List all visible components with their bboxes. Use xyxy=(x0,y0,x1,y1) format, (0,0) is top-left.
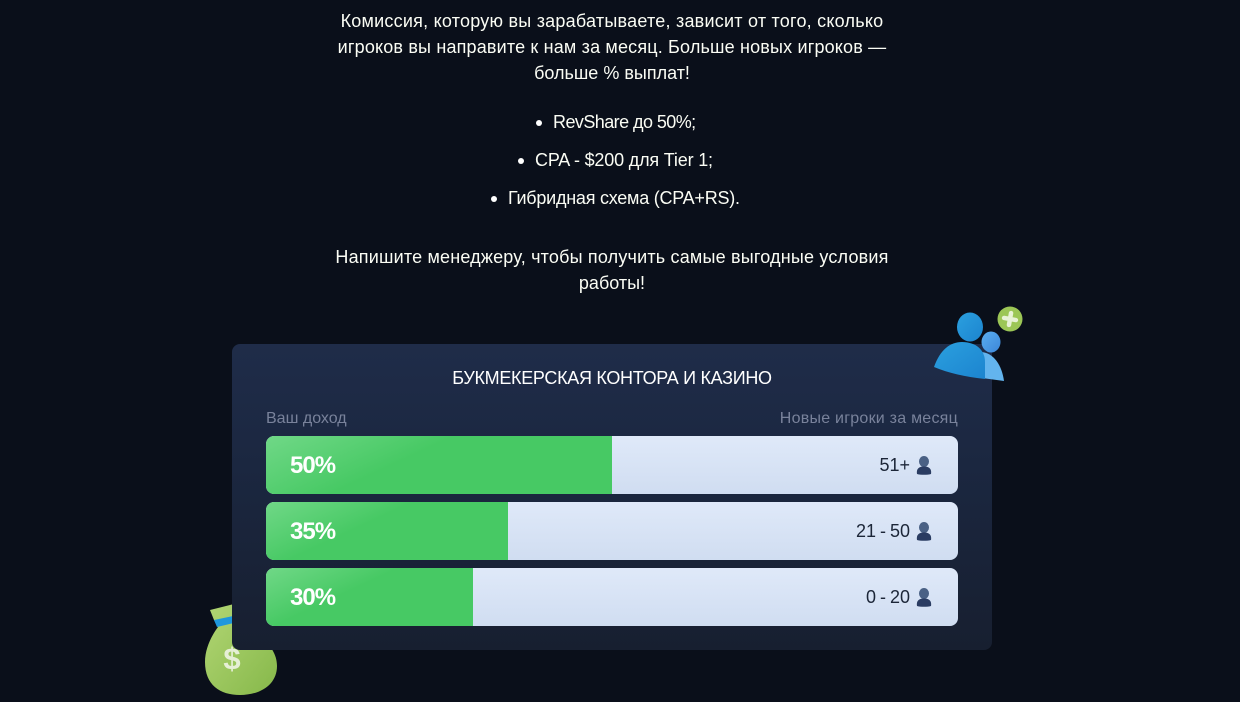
bar: 30%: 30% xyxy=(290,584,335,611)
column label: new players: Новые игроки за месяц xyxy=(780,410,958,427)
bullet list xyxy=(491,112,740,208)
panel heading: БУКМЕКЕРСКАЯ КОНТОРА И КАЗИНО xyxy=(452,368,772,388)
column label: income: Ваш доход xyxy=(266,410,347,427)
intro text: Комиссия, которую вы зарабатываете, зависит от того, сколько xyxy=(341,11,883,31)
manager call to action xyxy=(335,247,889,293)
intro text: игроков вы направите к нам за месяц. Больше новых игроков — xyxy=(338,37,886,57)
bullet: cpa: CPA - $200 для Tier 1; xyxy=(535,150,713,170)
icon: users with plus xyxy=(934,306,1022,381)
bar: 50% xyxy=(266,436,958,494)
icon: money bag xyxy=(205,604,277,695)
bar: 35%: 35% xyxy=(290,518,335,545)
bar: 35% xyxy=(266,502,958,560)
bar: 50%: 51+ xyxy=(879,455,910,475)
bar: 30% xyxy=(266,568,958,626)
bullet: revshare: RevShare до 50%; xyxy=(553,112,696,132)
bar: 50%: 50% xyxy=(290,452,335,479)
bar: 35%: 21 - 50 xyxy=(856,521,910,541)
manager call to action: работы! xyxy=(579,273,645,293)
intro text xyxy=(338,11,886,83)
panel: bookmaker and casino xyxy=(232,344,992,650)
intro text: больше % выплат! xyxy=(534,63,690,83)
bullet: hybrid: Гибридная схема (CPA+RS). xyxy=(508,188,740,208)
icon: money bag: $ xyxy=(223,641,241,676)
bar: 30%: 0 - 20 xyxy=(866,587,910,607)
manager call to action: Напишите менеджеру, чтобы получить самые выгодные условия xyxy=(335,247,889,267)
